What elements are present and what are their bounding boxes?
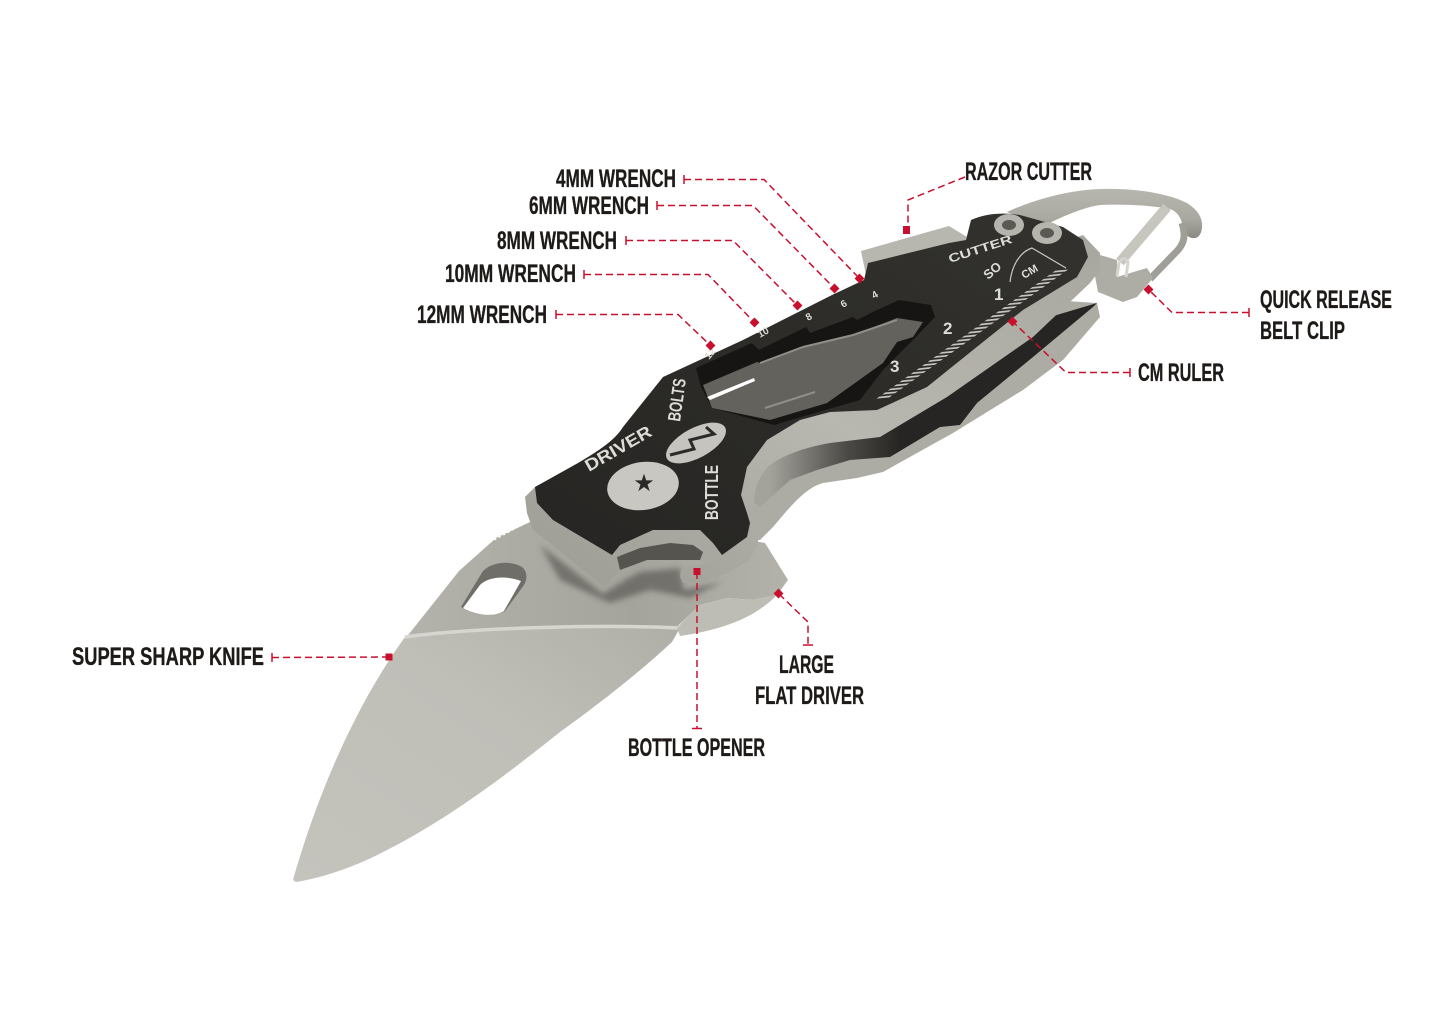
callout: 4mm wrench: 4MM WRENCH [556, 165, 676, 193]
callout: large flat driver: LARGE [779, 651, 834, 679]
handle engraved labels: DRIVER [581, 422, 655, 475]
illustration: folding knife multitool [293, 189, 1202, 882]
handle engraved labels: 12 [703, 346, 719, 362]
callout: 6mm wrench [529, 192, 839, 293]
carabiner lower frame [1150, 223, 1184, 279]
carabiner belt clip [1007, 189, 1202, 302]
thumb hole opening [463, 578, 521, 615]
slot opening [696, 300, 935, 425]
callout: super sharp knife: SUPER SHARP KNIFE [72, 643, 264, 671]
slot steps highlight [760, 320, 897, 408]
blade with finger hole [293, 521, 788, 882]
spine jimping [490, 521, 528, 542]
handle screw [604, 457, 682, 515]
steel liner with bottle hook [525, 235, 1100, 586]
blade lower bevel [293, 627, 680, 882]
flat driver curve [677, 595, 777, 636]
callout: razor cutter [903, 158, 1092, 234]
handle engraved labels: 6 [839, 298, 850, 311]
screw star: ★ [633, 469, 655, 497]
callout: quick release belt clip [1144, 285, 1392, 345]
wire loop [1117, 259, 1128, 277]
razor cutter [861, 226, 975, 285]
wrench slot [696, 300, 935, 425]
callout: bottle opener: BOTTLE OPENER [628, 734, 765, 762]
dark recess between layers [750, 303, 1097, 507]
callout: bottle opener [628, 568, 765, 762]
callout: 10mm wrench: 10MM WRENCH [445, 260, 576, 288]
callout: 8mm wrench [497, 227, 802, 310]
callout: 12mm wrench [417, 301, 715, 350]
carabiner hook body [1007, 189, 1202, 238]
folded tool layer [745, 300, 1100, 540]
handle engraved labels: 8 [804, 311, 815, 324]
handle engraved labels: 4 [870, 289, 881, 302]
handle engraved labels: 3 [890, 357, 899, 376]
thumb hole [461, 563, 526, 615]
slot inner steel [703, 318, 923, 420]
callout: large flat driver: FLAT DRIVER [755, 682, 864, 710]
handle engraved labels: CM [1020, 263, 1040, 282]
shadow under liner [540, 545, 722, 603]
carabiner gate [1120, 207, 1167, 262]
black handle [535, 214, 1088, 555]
handle engraved labels: 1 [994, 285, 1003, 304]
handle engraved labels: BOLTS [664, 377, 690, 423]
callout: 8mm wrench: 8MM WRENCH [497, 227, 617, 255]
callout: cm ruler: CM RULER [1138, 359, 1224, 387]
blade upper flat [405, 522, 788, 641]
handle engraved labels [581, 232, 1066, 520]
handle engraved labels: BOTTLE [701, 465, 722, 520]
callout: cm ruler [1008, 317, 1224, 387]
top screws [994, 214, 1062, 244]
callout: quick release belt clip: BELT CLIP [1260, 317, 1345, 345]
handle engraved labels: 2 [943, 319, 952, 338]
callout: 12mm wrench: 12MM WRENCH [417, 301, 547, 329]
handle engraved labels: SO [980, 259, 1004, 282]
mounting block [1090, 250, 1153, 302]
handle engraved labels: CUTTER [947, 232, 1014, 266]
callout: 10mm wrench [445, 260, 759, 327]
logo badge [660, 414, 732, 472]
callout: 6mm wrench: 6MM WRENCH [529, 192, 649, 220]
slot white gap [707, 378, 755, 400]
handle engraved labels: 10 [756, 325, 772, 341]
bevel highlight [405, 626, 682, 637]
callout: razor cutter: RAZOR CUTTER [965, 158, 1092, 186]
ruler ticks [883, 268, 1064, 398]
callout: 4mm wrench [556, 165, 864, 283]
bottle opener opening [617, 543, 703, 570]
callout: large flat driver [755, 589, 864, 710]
